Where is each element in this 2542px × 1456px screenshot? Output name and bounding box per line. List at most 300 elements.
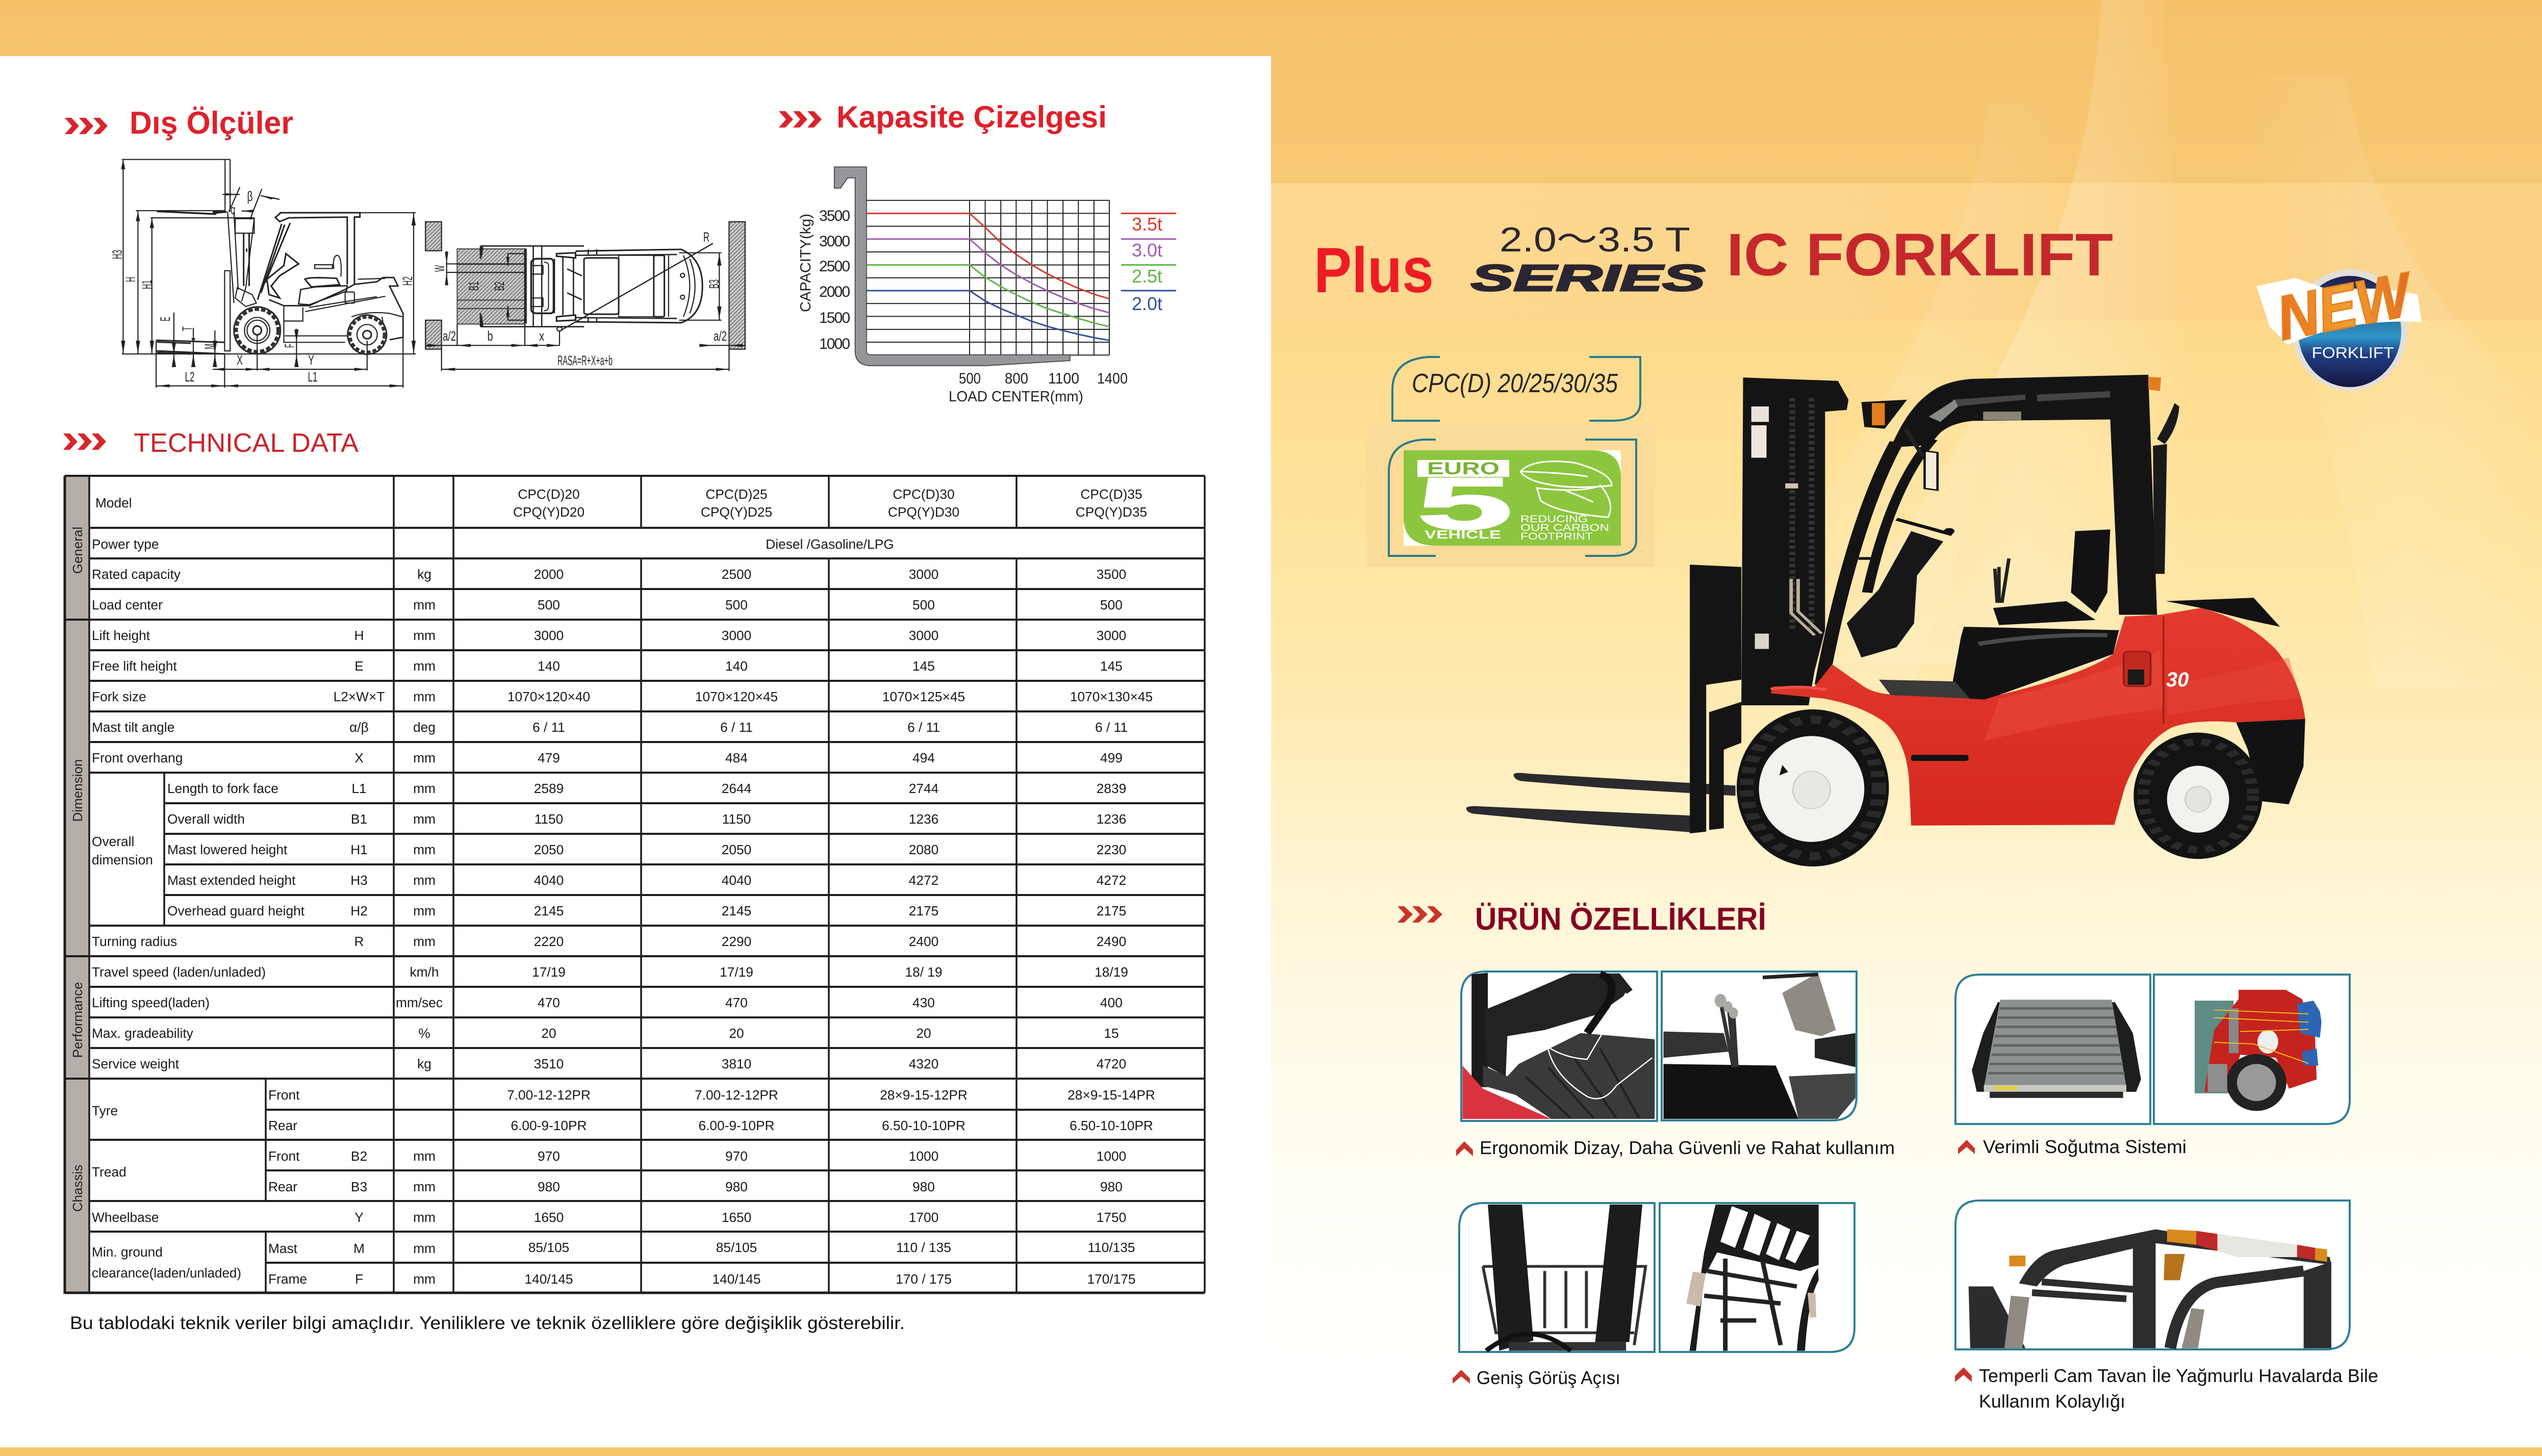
table row: Travel speed: Travel speed (laden/unladed) (92, 964, 266, 980)
table row: Mast lowered height: mm (413, 842, 436, 857)
heading: TECHNICAL DATA: TECHNICAL DATA (134, 428, 359, 458)
table row: Max gradeability (92, 1026, 1119, 1041)
photo: radiator (1955, 975, 2150, 1124)
caption: Temperli Cam Tavan İle Yağmurlu Havalarda Bile (1979, 1365, 2378, 1386)
table row: Tread front: Front (268, 1148, 300, 1164)
table row: Travel speed: 18/19 (1095, 964, 1128, 980)
dimension letter labels: H1 (139, 280, 155, 289)
table row: Turning radius (92, 934, 1126, 949)
table row: Length to fork face: Length to fork face (167, 781, 278, 796)
table row: Mast tilt angle: deg (413, 720, 436, 735)
table row: Max gradeability: Max. gradeability (92, 1026, 194, 1041)
table row: Front overhang: 484 (725, 750, 748, 765)
table row: Model: CPC(D)30 (893, 487, 955, 502)
table group label: Tread: Tread (92, 1164, 126, 1180)
chart axis labels: 1100 (1048, 370, 1079, 387)
table row: Tread rear: 980 (538, 1179, 560, 1194)
table row: Tread rear: B3 (351, 1179, 367, 1194)
table row: Service weight: kg (417, 1056, 431, 1071)
table row: Overall width: mm (413, 811, 436, 827)
table row: Frame clearance: Frame (268, 1271, 307, 1287)
table row: Turning radius: 2290 (722, 934, 751, 949)
chart axis labels: CAPACITY(kg) (798, 214, 814, 312)
table row: Lifting speed (92, 995, 1123, 1010)
chart grid, fork outline and curves (834, 167, 1176, 366)
front wheel (1737, 709, 1889, 866)
chart axis labels: 3000 (819, 233, 850, 250)
side view drawing (121, 160, 416, 388)
mast (1690, 377, 1848, 833)
table row: Model: CPQ(Y)D25 (701, 504, 772, 520)
table row: Mast extended height: Mast extended height (167, 873, 296, 888)
table row: Mast clearance: 110/135 (1087, 1240, 1135, 1255)
table row: Power type (92, 537, 894, 552)
table sidebar: Chassis (70, 1165, 85, 1212)
table grid (65, 476, 1205, 1294)
table row: Frame clearance: F (355, 1271, 363, 1287)
table row: Mast tilt angle: α/β (349, 720, 369, 735)
table row: Mast lowered height: H1 (350, 842, 368, 857)
table row: Overall width (167, 811, 1126, 827)
table row: Mast lowered height: 2080 (909, 842, 938, 857)
table row: Tyre rear (268, 1118, 1153, 1133)
table row: Free lift height: mm (413, 658, 436, 674)
table row: Fork size: 1070×120×45 (695, 689, 778, 704)
rear wheel (2133, 733, 2263, 859)
table row: Wheelbase: Y (354, 1210, 364, 1225)
table row: Tread front: mm (413, 1148, 436, 1164)
table row: Service weight: Service weight (92, 1056, 180, 1071)
table row: Fork size: 1070×130×45 (1070, 689, 1153, 704)
table row: Mast lowered height: 2050 (722, 842, 751, 857)
table row: Service weight: 3510 (534, 1056, 564, 1071)
table row: Max gradeability: % (418, 1026, 430, 1041)
table row: Lift height: Lift height (92, 628, 150, 643)
title: Plus 2.0~3.5 T Series IC Forklift: IC FORKLIFT (1726, 221, 2113, 289)
table row: Tread front: 1000 (909, 1148, 938, 1164)
table row: Rated capacity: kg (417, 567, 431, 582)
table group label: Tyre: Tyre (92, 1103, 118, 1118)
caption: Ergonomik Dizay, Daha Güvenli ve Rahat kullanım (1480, 1137, 1895, 1158)
table row: Travel speed: km/h (410, 964, 439, 980)
table row: Wheelbase: Wheelbase (92, 1210, 159, 1225)
photo: control levers (1662, 972, 1857, 1120)
dimension letter labels: H2 (400, 276, 415, 286)
table row: Frame clearance: 170/175 (1087, 1271, 1136, 1287)
table sidebar: Performance (70, 982, 85, 1058)
badge: NEW forklift (2256, 259, 2422, 391)
table row: Max gradeability: 15 (1104, 1026, 1119, 1041)
table row: Tyre rear: 6.00-9-10PR (698, 1118, 775, 1133)
table row: Length to fork face (167, 781, 1126, 796)
badge: Euro 5 vehicle: VEHICLE (1425, 528, 1501, 541)
table row: Length to fork face: 2744 (909, 781, 938, 796)
table row: Turning radius: R (354, 934, 364, 949)
table row: Turning radius: mm (413, 934, 436, 949)
table row: Overall width: 1150 (535, 811, 563, 827)
caption: Geniş Görüş Açısı (1477, 1367, 1620, 1388)
forks (1466, 773, 1736, 832)
table row: Overall width: B1 (351, 811, 367, 827)
table row: Service weight: 3810 (722, 1056, 751, 1071)
caption: Kullanım Kolaylığı (1979, 1391, 2125, 1412)
table row: Lifting speed: 400 (1100, 995, 1123, 1010)
dimension letter labels: x (539, 328, 544, 344)
table row: Model: CPQ(Y)D35 (1076, 504, 1147, 520)
table row: Length to fork face: 2644 (722, 781, 751, 796)
table row: Max gradeability: 20 (729, 1026, 744, 1041)
table row: Mast clearance: 85/105 (716, 1240, 757, 1255)
table row: Rated capacity (92, 567, 1126, 582)
table row: Free lift height: E (354, 658, 364, 674)
chart axis labels: 1500 (819, 310, 850, 326)
table row: Mast tilt angle (92, 720, 1128, 735)
table row: Frame clearance: 170 / 175 (896, 1271, 952, 1287)
table row: Overall width: 1236 (1097, 811, 1126, 827)
chart axis labels: 2500 (819, 258, 850, 275)
table row: Load center: 500 (1100, 597, 1123, 612)
table row: Mast clearance: 110 / 135 (896, 1240, 951, 1255)
table row: Lift height: 3000 (1097, 628, 1126, 643)
table row: Tyre front (268, 1087, 1155, 1103)
table row: Lift height: 3000 (534, 628, 564, 643)
chart legend (1132, 214, 1162, 314)
chart axis labels: LOAD CENTER(mm) (949, 389, 1083, 405)
badge: Euro 5 vehicle: 5 (1417, 463, 1513, 545)
table row: Mast clearance: Mast (268, 1241, 298, 1256)
table row: Mast extended height: H3 (350, 873, 368, 888)
table row: Mast lowered height: Mast lowered height (167, 842, 288, 857)
table row: Fork size: 1070×125×45 (882, 689, 965, 704)
table row: Tread front: 1000 (1097, 1148, 1126, 1164)
badge: Euro 5 vehicle: REDUCING (1520, 514, 1588, 525)
panel: white specifications sheet (0, 56, 1271, 1447)
table row: Tread front (268, 1148, 1126, 1164)
chart legend: 2.0t (1132, 293, 1162, 314)
top view drawing (425, 222, 745, 371)
table row: Model: CPQ(Y)D30 (888, 504, 959, 520)
icon: caption chevron (1958, 1140, 1975, 1154)
table row: Mast tilt angle: 6 / 11 (720, 720, 753, 735)
dimension letter labels: L2 (185, 369, 195, 385)
badge: Euro 5 vehicle (1367, 424, 1655, 567)
table row: Turning radius: 2220 (534, 934, 564, 949)
table row: Travel speed: 17/19 (720, 964, 753, 980)
chart axis labels: 3500 (819, 208, 850, 224)
chart: capacity vs load center (798, 167, 1176, 405)
heading: Kapasite Çizelgesi: Kapasite Çizelgesi (836, 100, 1107, 134)
feature: ergonomic design (1456, 972, 1895, 1158)
feature: efficient cooling (1955, 975, 2350, 1157)
table row: Front overhang: 499 (1100, 750, 1123, 765)
chart axis labels (798, 208, 1128, 405)
table row: Max gradeability: 20 (541, 1026, 556, 1041)
table row: Lifting speed: Lifting speed(laden) (92, 995, 210, 1010)
forklift capacity marking: 30 (2166, 669, 2189, 691)
table row: Model: CPC(D)20 (518, 487, 580, 502)
badge: Euro 5 vehicle: OUR CARBON (1520, 523, 1609, 533)
table row: Load center: 500 (538, 597, 560, 612)
table row: Tread rear: 980 (725, 1179, 748, 1194)
table row: Lift height: 3000 (722, 628, 751, 643)
title: Plus 2.0~3.5 T Series IC Forklift: Plus (1314, 235, 1434, 306)
table row: Length to fork face: 2839 (1097, 781, 1126, 796)
title: Plus 2.0~3.5 T Series IC Forklift (1314, 220, 2113, 306)
table sidebar (65, 476, 89, 1293)
table row: Tyre front: 28×9-15-12PR (880, 1087, 968, 1103)
table row: Fork size: L2×W×T (334, 689, 385, 704)
table row: Front overhang: Front overhang (92, 750, 183, 765)
table row: Mast lowered height: 2230 (1097, 842, 1126, 857)
table row: Free lift height: 145 (912, 658, 935, 674)
red body (1771, 608, 2305, 826)
table row: Turning radius: 2400 (909, 934, 938, 949)
table row: Rated capacity: 2000 (534, 567, 564, 582)
photo: cooling airflow diagram (2154, 975, 2350, 1124)
dimension letter labels: RASA=R+X+a+b (557, 353, 613, 368)
table row: Mast lowered height (167, 842, 1126, 857)
table row: Service weight: 4320 (909, 1056, 938, 1071)
table row: Lifting speed: 470 (725, 995, 748, 1010)
callout: model range (1392, 357, 1640, 421)
table row: Overhead guard height: 2145 (534, 903, 564, 918)
table row: Lifting speed: 430 (912, 995, 935, 1010)
chart legend: 3.5t (1132, 214, 1162, 235)
table row: Front overhang: mm (413, 750, 436, 765)
table row: Overhead guard height: Overhead guard height (167, 903, 305, 918)
chart axis labels: 1000 (819, 336, 850, 352)
table row: Load center: 500 (912, 597, 935, 612)
table row: Tyre rear: 6.50-10-10PR (882, 1118, 965, 1133)
table row: Length to fork face: L1 (351, 781, 367, 796)
table row: Rated capacity: 2500 (722, 567, 751, 582)
table row: Max gradeability: 20 (916, 1026, 931, 1041)
photo: red forklift (1466, 375, 2305, 866)
table row: Model (95, 487, 1147, 520)
chart legend: 2.5t (1132, 266, 1162, 287)
warning lamps and mirror (1862, 377, 2161, 490)
table row: Tread front: 970 (725, 1148, 748, 1164)
table row: Service weight (92, 1056, 1126, 1071)
dimension letter labels: T (180, 326, 195, 331)
table row: Tread rear: mm (413, 1179, 436, 1194)
table row: Model: CPC(D)25 (705, 487, 768, 502)
icon: caption chevron (1453, 1370, 1470, 1384)
overhead guard (1821, 375, 2157, 685)
table row: Overall width: Overall width (167, 811, 245, 827)
table row: Tread rear: Rear (268, 1179, 297, 1194)
table row: Mast extended height (167, 873, 1126, 888)
table row: Mast extended height: 4272 (1097, 873, 1126, 888)
caption (1979, 1365, 2378, 1412)
table row: Tread rear (268, 1179, 1123, 1194)
table row: Free lift height: 145 (1100, 658, 1123, 674)
dimension letter labels: R (703, 229, 709, 245)
table row: Lift height: mm (413, 628, 436, 643)
table row: Service weight: 4720 (1097, 1056, 1126, 1071)
table row: Overhead guard height: 2175 (909, 903, 938, 918)
photo: roof and mast view (1660, 1203, 1854, 1352)
table group label: Overall dimension: dimension (92, 852, 153, 867)
feature: wide view angle (1453, 1203, 1854, 1388)
table row: Fork size (92, 689, 1153, 704)
table row: Rated capacity: Rated capacity (92, 567, 181, 582)
table row: Tyre rear: 6.00-9-10PR (511, 1118, 587, 1133)
feature: tempered glass roof (1955, 1200, 2378, 1412)
table row: Overhead guard height: H2 (350, 903, 368, 918)
dimension letter labels: a/2 (443, 328, 456, 344)
table row: Tyre rear: 6.50-10-10PR (1070, 1118, 1153, 1133)
table row: Overall width: 1150 (722, 811, 751, 827)
steering column and levers (1847, 519, 2009, 657)
table row: Overhead guard height: mm (413, 903, 436, 918)
table row: Length to fork face: mm (413, 781, 436, 796)
table row: Free lift height: 140 (725, 658, 748, 674)
table row: Front overhang (92, 750, 1123, 765)
dimension letter labels: B2 (492, 282, 507, 291)
table row: Mast lowered height: 2050 (534, 842, 564, 857)
table row: Lift height: 3000 (909, 628, 938, 643)
table row: Mast extended height: 4040 (534, 873, 564, 888)
table row: Travel speed: 17/19 (532, 964, 566, 980)
dimension letter labels: H3 (110, 250, 125, 259)
badge: NEW forklift: NEW (2271, 259, 2420, 353)
dimension letter labels: β (247, 189, 253, 204)
table row: Overhead guard height: 2175 (1097, 903, 1126, 918)
table row: Length to fork face: 2589 (534, 781, 564, 796)
table row: Frame clearance: 140/145 (524, 1271, 573, 1287)
dimension letter labels: M (202, 344, 217, 349)
table row: Fork size: Fork size (92, 689, 146, 704)
table row: Wheelbase: 1650 (534, 1210, 564, 1225)
title: Plus 2.0~3.5 T Series IC Forklift: SERIES (1471, 258, 1705, 299)
table row: Mast tilt angle: 6 / 11 (1095, 720, 1128, 735)
table row: Mast clearance: M (353, 1241, 365, 1256)
table row: Load center: Load center (92, 597, 163, 612)
table row: Power type: Diesel /Gasoline/LPG (766, 537, 894, 552)
table: technical data (65, 476, 1205, 1294)
table row: Mast clearance: 85/105 (528, 1240, 569, 1255)
table row: Travel speed (92, 964, 1128, 980)
dimension letter labels: B1 (466, 282, 481, 291)
table row: Mast extended height: 4040 (722, 873, 751, 888)
dimension letter labels: X (237, 352, 243, 368)
photo: mast front view (1459, 1203, 1655, 1352)
badge: Euro 5 vehicle: FOOTPRINT (1520, 531, 1593, 542)
dimension letter labels: F (282, 344, 297, 348)
heading: Ürün Özellikleri: ÜRÜN ÖZELLİKLERİ (1475, 902, 1766, 937)
dimension letter labels: H (123, 277, 138, 282)
table row: Rated capacity: 3500 (1097, 567, 1126, 582)
table row: Free lift height (92, 658, 1123, 674)
table row: Lift height (92, 628, 1126, 643)
photo: overhead guard with lights (1955, 1200, 2350, 1349)
black seat box and seat (1879, 529, 2305, 804)
table row: Power type: Power type (92, 537, 159, 552)
table group label: Overall dimension (92, 834, 153, 867)
table row: Lifting speed: 470 (538, 995, 560, 1010)
table row: Tread rear: 980 (1100, 1179, 1123, 1194)
heading: Dış Ölçüler: Dış Ölçüler (130, 106, 293, 141)
chart axis labels: 2000 (819, 284, 850, 300)
table row: Model: CPQ(Y)D20 (513, 504, 584, 520)
caption: Verimli Soğutma Sistemi (1983, 1136, 2187, 1157)
callout: model range: CPC(D) 20/25/30/35 (1412, 369, 1618, 398)
table row: Travel speed: 18/ 19 (905, 964, 943, 980)
table row: Front overhang: X (354, 750, 364, 765)
table row: Free lift height: 140 (538, 658, 560, 674)
table row: Frame clearance: mm (413, 1271, 436, 1287)
diagram: forklift outer dimensions (110, 160, 745, 388)
table row: Tyre front: Front (268, 1087, 300, 1103)
dimension letter labels: α (231, 202, 236, 217)
table row: Tyre front: 7.00-12-12PR (507, 1087, 591, 1103)
chart axis labels: 800 (1005, 370, 1028, 387)
body highlights (1771, 617, 2301, 741)
table row: Mast extended height: 4272 (909, 873, 938, 888)
table row: Wheelbase (92, 1210, 1126, 1225)
table group label: Min ground clearance: clearance(laden/unladed) (92, 1265, 241, 1281)
photo: operator floor (1461, 972, 1657, 1121)
table row: Lift height: H (354, 628, 364, 643)
table row: Mast tilt angle: 6 / 11 (907, 720, 940, 735)
table row: Overall width: 1236 (909, 811, 938, 827)
badge: Euro 5 vehicle: EURO (1427, 459, 1499, 478)
table group label: Overall dimension: Overall (92, 834, 134, 849)
icon: caption chevron (1955, 1367, 1972, 1382)
table row: Tread rear: 980 (912, 1179, 935, 1194)
table row: Wheelbase: 1650 (722, 1210, 751, 1225)
table sidebar: Dimension (70, 759, 85, 822)
table row: Overhead guard height: 2145 (722, 903, 751, 918)
table row: Rated capacity: 3000 (909, 567, 938, 582)
dimension letter labels: B3 (706, 279, 722, 289)
table group label: Min ground clearance: Min. ground (92, 1244, 163, 1260)
table row: Mast tilt angle: Mast tilt angle (92, 720, 174, 735)
table row: Frame clearance: 140/145 (712, 1271, 761, 1287)
table row: Front overhang: 494 (912, 750, 935, 765)
exhaust pipe (2153, 403, 2179, 574)
table row: Tread front: 970 (538, 1148, 560, 1164)
dimension letter labels: b (488, 328, 493, 344)
badge: NEW forklift: FORKLIFT (2311, 344, 2394, 362)
dimension letter labels: Y (308, 352, 314, 368)
table row: Tyre front: 28×9-15-14PR (1067, 1087, 1155, 1103)
dimension letter labels: W (432, 265, 447, 272)
table row: Tyre front: 7.00-12-12PR (695, 1087, 778, 1103)
table row: Mast tilt angle: 6 / 11 (532, 720, 565, 735)
table row: Load center: mm (413, 597, 436, 612)
table row: Wheelbase: 1750 (1097, 1210, 1126, 1225)
table row: Frame clearance (268, 1271, 1136, 1287)
table row: Overhead guard height (167, 903, 1126, 918)
table row: Free lift height: Free lift height (92, 658, 177, 674)
icon: caption chevron (1456, 1141, 1473, 1156)
table row: Mast clearance (268, 1240, 1135, 1256)
table row: Model: CPC(D)35 (1080, 487, 1142, 502)
chart legend: 3.0t (1132, 240, 1162, 261)
table row: Tyre rear: Rear (268, 1118, 297, 1133)
table row: Turning radius: Turning radius (92, 934, 177, 949)
chart axis labels: 1400 (1097, 370, 1128, 387)
title: Plus 2.0~3.5 T Series IC Forklift: 2.0～3.5 T (1499, 220, 1690, 259)
table row: Wheelbase: mm (413, 1210, 436, 1225)
table row: Turning radius: 2490 (1097, 934, 1126, 949)
table row: Load center: 500 (725, 597, 748, 612)
table row: Load center (92, 597, 1123, 612)
table row: Front overhang: 479 (538, 750, 560, 765)
table row: Mast extended height: mm (413, 873, 436, 888)
